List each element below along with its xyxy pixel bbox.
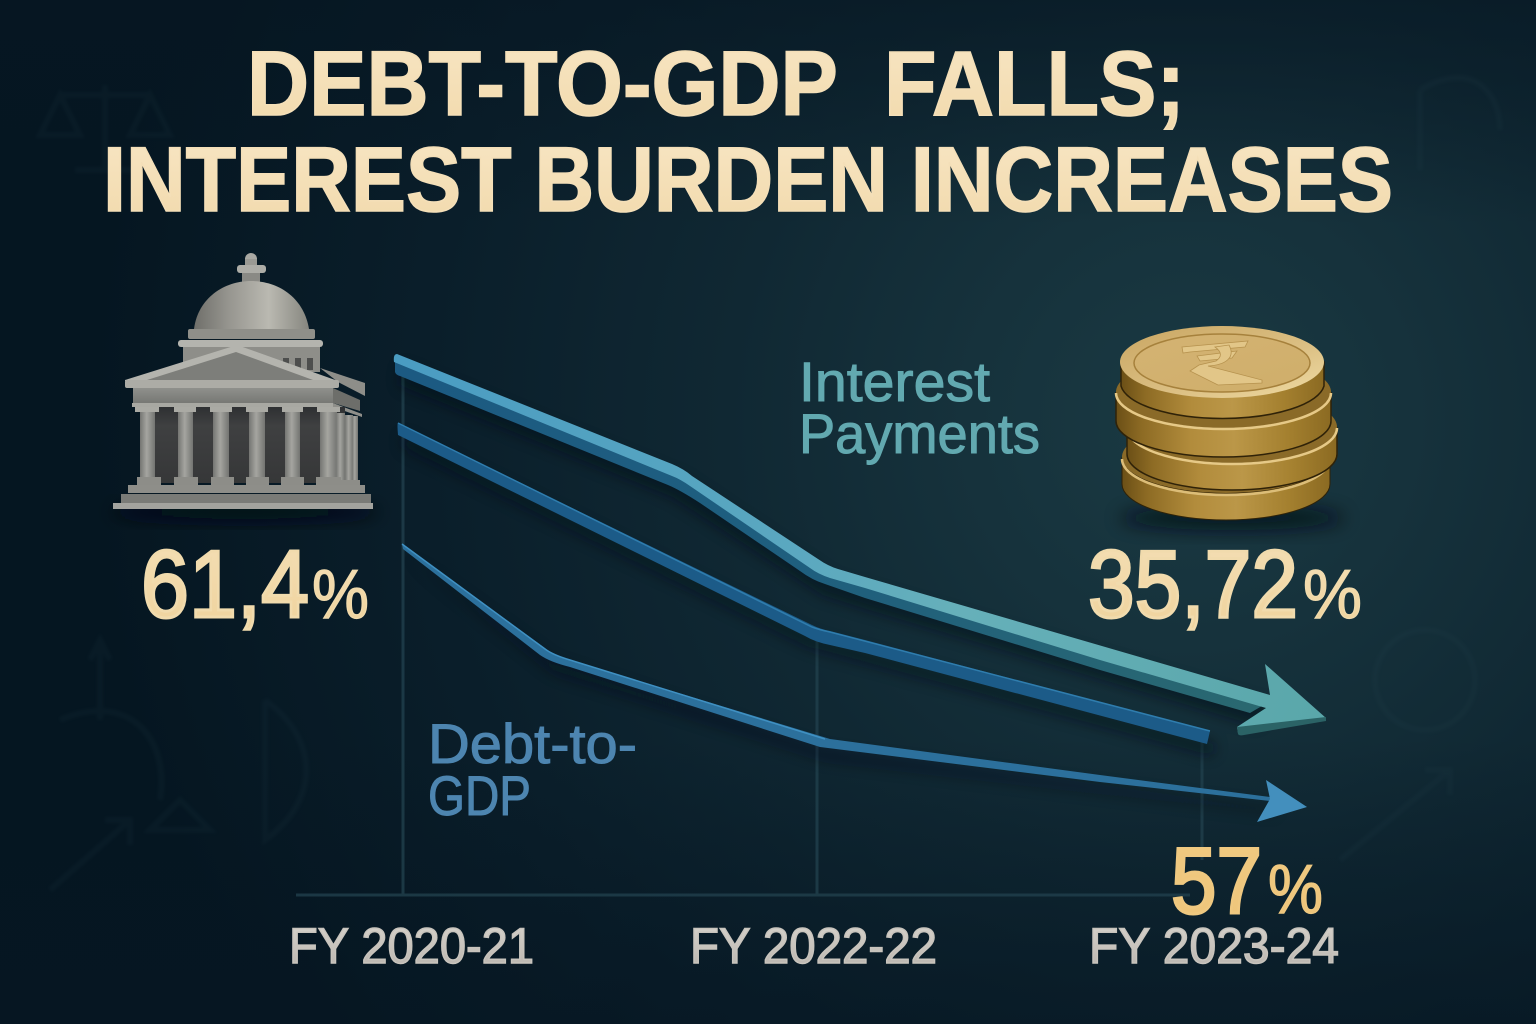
value: 61,4%: 61,4 [141,531,309,638]
coin 4 [1122,421,1330,520]
value: 35,72%: 35,72 [1088,531,1298,638]
label: interest payments: Interest [799,350,990,413]
icon: rupee coin stack [1116,326,1344,530]
chart axes and gridlines [296,375,1202,895]
interior [150,407,345,483]
title: DEBT-TO-GDP FALLS; [247,33,1185,135]
column bases [137,477,360,485]
dome finial [237,253,266,282]
axis labels: FY 2023-24 [1089,918,1339,974]
columns [140,412,358,485]
title [103,33,1393,231]
value: 57% [1171,828,1323,933]
value: 57%: % [1268,850,1323,928]
line: interest payments (thick arrow) [394,354,1326,735]
line: debt-to-GDP (thin arrow) [402,544,1307,822]
label: interest payments: Payments [799,402,1040,465]
label: debt-to-GDP: GDP [428,764,531,827]
value: 61,4%: % [312,555,369,633]
coin 1 side [1121,362,1324,418]
coin 1 top [1120,326,1324,398]
value: 35,72%: % [1303,555,1362,633]
steps [128,485,365,493]
axis labels [289,918,1339,974]
axis labels: FY 2020-21 [289,918,534,974]
label: interest payments [799,350,1040,465]
faint background icons [40,78,1500,890]
pediment [125,345,338,381]
dome [194,281,309,329]
entablature [133,388,333,403]
label: debt-to-GDP: Debt-to- [428,712,637,775]
title: INTEREST BURDEN INCREASES [103,129,1393,231]
value: 57%: 57 [1171,828,1262,933]
label: debt-to-GDP [428,712,637,827]
side roof [320,368,365,396]
column capitals [135,407,340,412]
line: middle trend [398,423,1210,744]
icon: government building [110,253,380,520]
axis labels: FY 2022-22 [690,918,937,974]
drum [183,347,320,372]
coin 3 [1127,391,1337,490]
coin 2 [1116,356,1331,457]
rupee symbol [1182,341,1262,385]
line shadows [400,366,1275,813]
